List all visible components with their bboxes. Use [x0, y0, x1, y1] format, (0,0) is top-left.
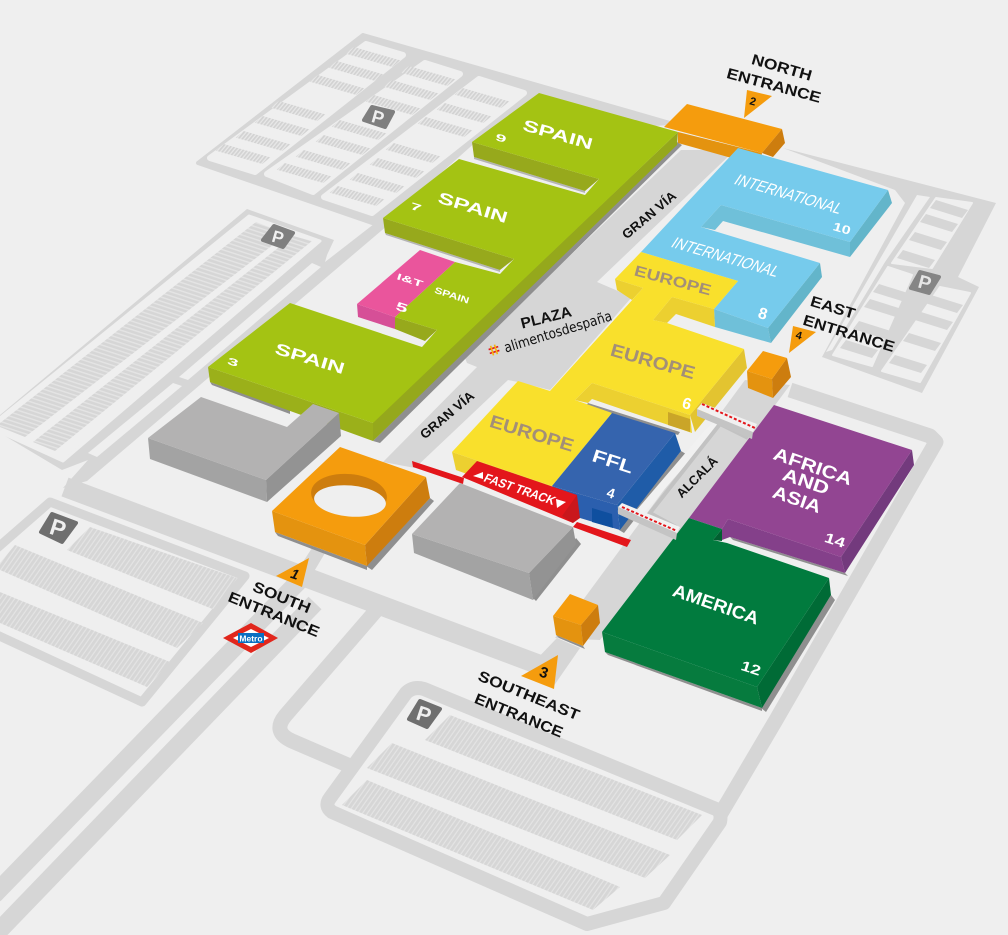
- entrance marker 4: [789, 326, 816, 353]
- parking sign: west: P: [270, 227, 286, 248]
- label: alimentos de España: alimentosdespaña: [502, 308, 614, 357]
- Alcalá walkway: [635, 420, 748, 527]
- fast track panel: [462, 461, 580, 523]
- label: FFL: [590, 445, 636, 502]
- label: hall 3: [226, 341, 346, 378]
- label: north entrance: NORTH: [750, 51, 814, 85]
- parking: west lot: [0, 216, 321, 461]
- label: southeast entrance: SOUTHEAST: [475, 668, 582, 724]
- bridge: hall 6 to hall 14: [697, 403, 757, 439]
- label: south entrance: [225, 579, 322, 641]
- label: hall 14: [770, 444, 855, 551]
- label: hall 8: [668, 235, 784, 324]
- label: hall 6: EUROPE: [608, 340, 697, 383]
- label: hall 6: 6: [680, 395, 693, 414]
- label: hall 8 Europe: EUROPE: [632, 263, 713, 299]
- bridge: hall 4 to hall 12: [618, 503, 680, 540]
- entrance marker 1: [276, 558, 309, 587]
- label: hall 10: 10: [831, 219, 853, 238]
- building: west service block: [148, 397, 341, 502]
- door: hall 6: [668, 412, 690, 432]
- parking sign: north: [364, 106, 393, 129]
- label: hall 3: 3: [226, 356, 240, 370]
- hall: FFL (4): [552, 413, 681, 530]
- entrance marker 4: 4: [794, 329, 804, 343]
- label: FFL: FFL: [590, 445, 636, 477]
- label: southeast entrance: ENTRANCE: [472, 690, 565, 741]
- building: southeast entrance: [553, 594, 600, 646]
- hall labels: [226, 117, 855, 679]
- building: north entrance: [664, 104, 785, 165]
- parking: north lots: [210, 44, 524, 213]
- label: FFL: 4: [605, 484, 617, 502]
- label: hall 12: 12: [739, 657, 763, 679]
- label: hall 5: [394, 271, 471, 316]
- hall: Spain (3, 5, 7, 9): [208, 93, 678, 441]
- building: central service block: [412, 483, 576, 600]
- parking: southwest lot: [0, 502, 245, 702]
- parking sign: east: [911, 272, 939, 295]
- entrance marker 2: [744, 90, 772, 118]
- parking sign: southwest: [41, 513, 76, 543]
- hall: International (8, 10): [641, 148, 892, 343]
- entrance marker 3: 3: [537, 664, 550, 682]
- entrance and street labels: [225, 51, 897, 741]
- hall: Europe (4, 6): [452, 252, 747, 505]
- fast track red line: [412, 461, 631, 547]
- label: hall 3: SPAIN: [273, 341, 346, 378]
- label: hall 4 Europe: EUROPE: [487, 411, 576, 456]
- label: hall 9: [494, 117, 595, 154]
- label: north entrance: ENTRANCE: [725, 65, 823, 107]
- label: hall 14: AFRICA: [771, 444, 855, 489]
- label: east entrance: [801, 293, 897, 356]
- label: hall 7: [409, 190, 509, 227]
- icon: metro: Metro: [239, 634, 263, 644]
- parking sign: north: P: [369, 106, 386, 129]
- label: Gran Vía south: GRAN VÍA: [417, 388, 478, 442]
- arrow: left: [473, 472, 483, 479]
- label: Gran Vía north: GRAN VÍA: [619, 188, 680, 242]
- parking: east lot: [826, 195, 972, 382]
- arrow: right: [556, 499, 566, 508]
- label: hall 14: ASIA: [770, 482, 824, 517]
- parking sign: southwest: P: [47, 513, 69, 543]
- icon: metro: [223, 623, 278, 653]
- label: hall 5: I&T: [396, 271, 425, 290]
- label: south entrance: ENTRANCE: [225, 589, 322, 641]
- label: hall 12: AMERICA: [670, 580, 762, 629]
- label: hall 14: 14: [823, 529, 848, 551]
- label: hall 5: SPAIN: [433, 285, 471, 306]
- label: hall 8: 8: [756, 305, 769, 324]
- label: hall 6: [608, 340, 697, 414]
- parking sign: east: P: [916, 272, 934, 295]
- hall: I&T: [357, 250, 455, 329]
- entrance marker 2: 2: [748, 95, 757, 109]
- parking signs: [41, 106, 939, 728]
- label: north entrance: [725, 51, 823, 107]
- label: hall 9: SPAIN: [521, 117, 595, 154]
- label: east entrance: EAST: [808, 293, 857, 323]
- entrance marker 3: [521, 655, 558, 689]
- parking: southeast lot: [327, 688, 720, 924]
- label: hall 7: 7: [409, 201, 423, 215]
- hall: Africa and Asia (14): [689, 405, 914, 573]
- building: east entrance: [747, 351, 791, 398]
- parking sign: west: [263, 226, 293, 248]
- building shadows: [210, 142, 848, 712]
- label: hall 8: INTERNATIONAL: [668, 235, 784, 280]
- building: south entrance: [272, 447, 430, 566]
- label: south entrance: SOUTH: [250, 579, 313, 617]
- label: hall 12: [670, 580, 763, 679]
- label: hall 7: SPAIN: [436, 190, 509, 227]
- entrance marker 1: 1: [289, 565, 301, 583]
- label: hall 10: INTERNATIONAL: [731, 172, 847, 217]
- label: Alcalá: ALCALÁ: [673, 453, 721, 501]
- label: hall 9: 9: [494, 132, 508, 146]
- label: fast track: FAST TRACK: [481, 471, 558, 508]
- parking sign: southeast: [409, 701, 440, 728]
- icon: hash mark: [488, 344, 500, 356]
- label: hall 5: 5: [394, 299, 410, 316]
- label: southeast entrance: [472, 668, 582, 741]
- label: east entrance: ENTRANCE: [801, 312, 897, 356]
- hall: America (12): [602, 518, 831, 708]
- door: FFL: [592, 508, 613, 528]
- label: plaza: PLAZA: [519, 303, 574, 333]
- label: hall 14: AND: [780, 464, 832, 499]
- parking sign: southeast: P: [413, 702, 434, 728]
